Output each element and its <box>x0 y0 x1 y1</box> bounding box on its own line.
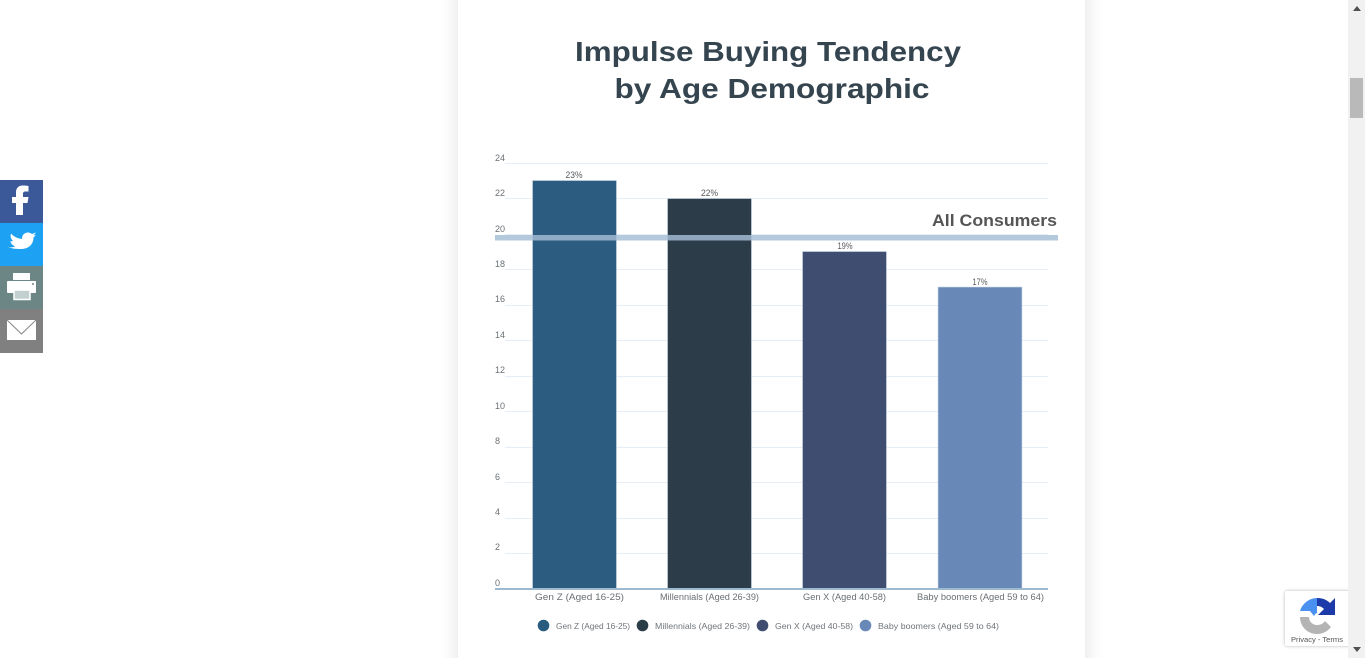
title <box>575 36 961 104</box>
scrollbar thumb <box>1350 78 1363 118</box>
y axis labels: 12 <box>495 365 505 375</box>
bar: Gen Z <box>532 180 616 589</box>
icon: twitter <box>0 223 43 266</box>
all consumers label: All Consumers <box>932 212 1057 230</box>
y axis labels <box>495 153 505 588</box>
y axis labels: 0 <box>495 578 500 588</box>
title: by Age Demographic <box>614 73 930 104</box>
x axis labels: Gen Z (Aged 16-25) <box>535 592 624 602</box>
title: Impulse Buying Tendency <box>575 36 961 67</box>
value labels: 23% <box>566 170 582 180</box>
y axis labels: 6 <box>495 472 500 482</box>
value labels: 17% <box>972 277 988 287</box>
y axis labels: 24 <box>495 153 505 163</box>
y axis labels: 4 <box>495 507 500 517</box>
y axis labels: 10 <box>495 401 505 411</box>
icon: email <box>0 309 43 353</box>
x axis labels: Baby boomers (Aged 59 to 64) <box>917 592 1044 602</box>
x axis labels: Millennials (Aged 26-39) <box>660 592 759 602</box>
icon: facebook <box>0 180 43 223</box>
y axis labels: 20 <box>495 224 505 234</box>
bar chart <box>532 180 1022 589</box>
y axis labels: 16 <box>495 294 505 304</box>
legend <box>538 620 999 631</box>
recaptcha badge <box>1285 591 1355 646</box>
legend: Baby boomers (Aged 59 to 64) <box>878 621 999 631</box>
y axis labels: 22 <box>495 188 505 198</box>
scrollbar <box>1348 0 1365 658</box>
icon: print <box>0 266 43 309</box>
recaptcha terms text: Privacy - Terms <box>1291 635 1343 644</box>
icon: recaptcha <box>1299 598 1335 634</box>
legend: Millennials (Aged 26-39) <box>655 621 750 631</box>
share sidebar <box>0 180 43 353</box>
y axis labels: 8 <box>495 436 500 446</box>
y axis labels: 2 <box>495 542 500 552</box>
y axis labels: 18 <box>495 259 505 269</box>
y axis labels: 14 <box>495 330 505 340</box>
x axis line <box>495 588 1048 590</box>
panel: chart card <box>458 0 1085 658</box>
legend: Gen X (Aged 40-58) <box>775 621 853 631</box>
all consumers reference line <box>495 235 1058 240</box>
value labels <box>566 170 988 287</box>
bar: Millennials <box>668 198 752 589</box>
value labels: 19% <box>838 241 852 251</box>
value labels: 22% <box>701 188 718 198</box>
legend: Gen Z (Aged 16-25) <box>556 621 630 631</box>
x axis labels: Gen X (Aged 40-58) <box>803 592 886 602</box>
bar: Baby boomers <box>938 287 1022 589</box>
bar: Gen X <box>802 252 886 589</box>
x axis labels <box>535 592 1044 602</box>
